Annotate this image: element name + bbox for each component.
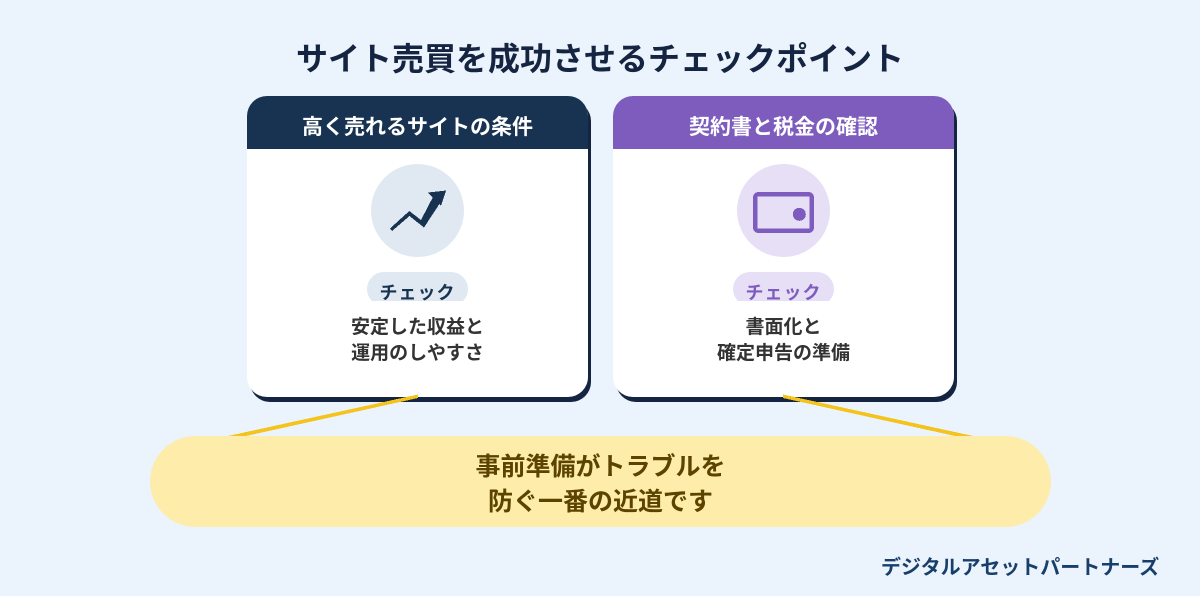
- callout: conclusion pill: 防ぐ一番の近道です: [488, 488, 713, 516]
- right card text: 確定申告の準備: [717, 342, 850, 364]
- icon: rising arrow chart: [371, 164, 464, 257]
- title: サイト売買を成功させるチェックポイント: [296, 41, 904, 77]
- callout: conclusion pill: [150, 436, 1051, 527]
- left card heading: [247, 96, 588, 149]
- left card heading: 高く売れるサイトの条件: [302, 116, 533, 139]
- footer brand: デジタルアセットパートナーズ: [881, 557, 1159, 579]
- left card text: 運用のしやすさ: [351, 342, 484, 364]
- callout: conclusion pill: 事前準備がトラブルを: [475, 453, 726, 481]
- left card text: [351, 316, 484, 364]
- panel: right card shadow: [616, 101, 957, 402]
- panel: contract and tax check: [613, 96, 954, 397]
- right card text: 書面化と: [745, 317, 822, 338]
- left card text: 安定した収益と: [351, 317, 484, 338]
- right card text: [717, 316, 850, 364]
- right card heading: [613, 96, 954, 149]
- right card heading: 契約書と税金の確認: [689, 116, 878, 139]
- panel: high value site conditions: [247, 96, 588, 397]
- panel: left card shadow: [250, 101, 591, 402]
- icon: card document: [737, 164, 830, 257]
